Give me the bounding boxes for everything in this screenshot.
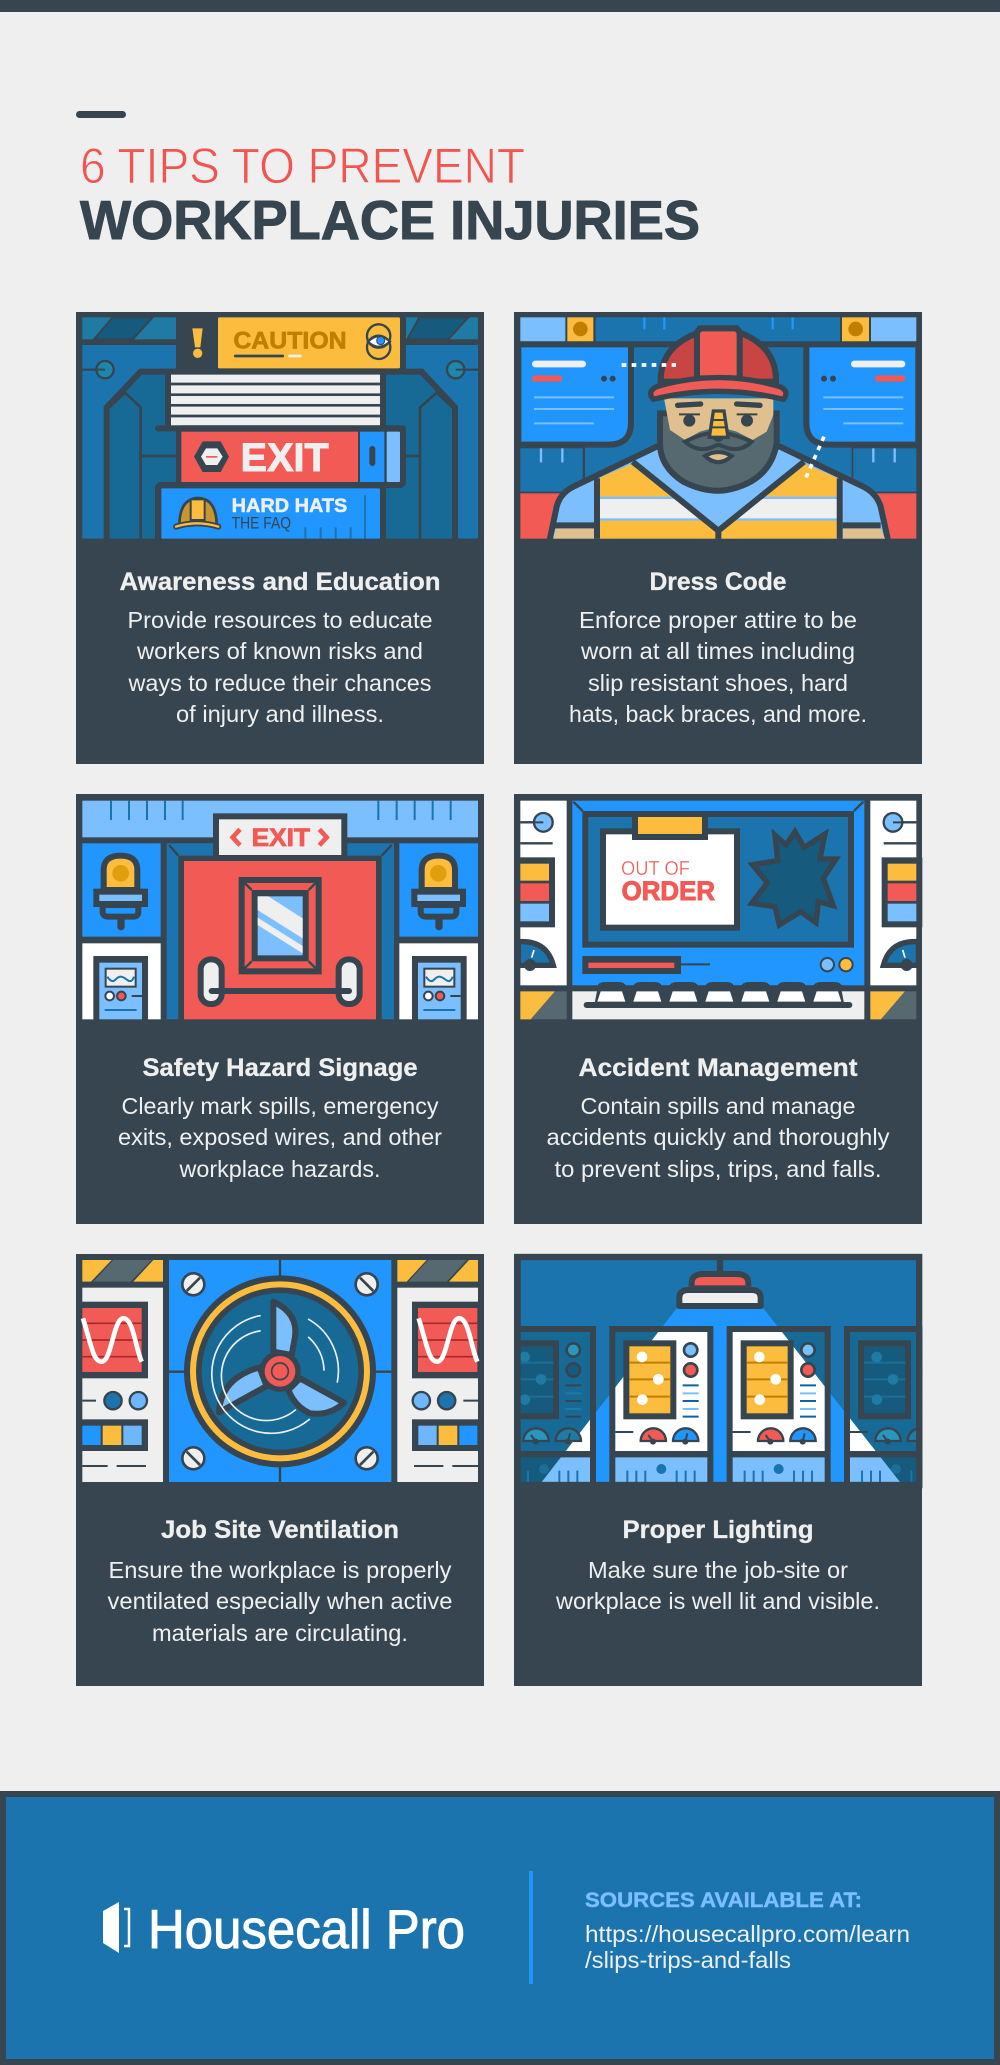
illustration: out of order machine (514, 801, 922, 1019)
illustration: ventilation fan (76, 1260, 484, 1482)
illustration: out of order machine: OUT OF (621, 858, 690, 880)
logo: Housecall Pro: Housecall Pro (148, 1898, 465, 1960)
illustration: caution, exit and hard hat signs: THE FAQ (232, 514, 291, 533)
card text: dress code: hats, back braces, and more. (569, 701, 867, 727)
card text: awareness and education (120, 568, 440, 727)
card text: dress code (569, 568, 867, 727)
title: WORKPLACE INJURIES (80, 189, 700, 251)
card text: job site ventilation: ventilated especially when active (108, 1588, 452, 1614)
sources text (585, 1889, 910, 1973)
illustration: out of order machine: ORDER (622, 876, 715, 906)
panel: job site ventilation (76, 1254, 484, 1686)
panel: accident management (514, 794, 922, 1224)
sources text: SOURCES AVAILABLE AT: (585, 1889, 862, 1912)
sources text: /slips-trips-and-falls (585, 1947, 791, 1973)
illustration: caution, exit and hard hat signs: EXIT (241, 436, 329, 480)
card text: dress code: Dress Code (650, 568, 787, 596)
card text: accident management: Contain spills and manage (580, 1093, 856, 1119)
title (80, 138, 700, 251)
top bar (0, 0, 1000, 12)
card text: safety hazard signage (118, 1054, 442, 1182)
panel: proper lighting (514, 1254, 922, 1686)
footer (0, 1791, 1000, 2065)
card text: accident management: accidents quickly and thoroughly (546, 1124, 890, 1150)
card text: dress code: Enforce proper attire to be (579, 607, 857, 633)
title: 6 TIPS TO PREVENT (80, 138, 525, 194)
card text: job site ventilation (108, 1516, 452, 1646)
card text: accident management: Accident Management (578, 1054, 858, 1082)
card text: proper lighting: Proper Lighting (622, 1516, 814, 1544)
card text: safety hazard signage: Safety Hazard Signage (142, 1054, 418, 1082)
card text: accident management: to prevent slips, trips, and falls. (554, 1156, 882, 1182)
illustration: exit door with alarms: EXIT (252, 824, 310, 852)
divider (529, 1871, 533, 1984)
card text: awareness and education: Provide resources to educate (128, 607, 432, 633)
card text: proper lighting: workplace is well lit and visible. (555, 1588, 880, 1614)
illustration: caution, exit and hard hat signs: CAUTION (233, 327, 347, 354)
card text: awareness and education: Awareness and Education (120, 568, 440, 596)
card text: dress code: worn at all times including (580, 638, 855, 664)
sources text: https://housecallpro.com/learn (585, 1921, 910, 1947)
header accent dash (76, 111, 126, 118)
panel: awareness and education (76, 312, 484, 764)
card text: safety hazard signage: exits, exposed wires, and other (118, 1124, 442, 1150)
card text: job site ventilation: Ensure the workplace is properly (108, 1557, 452, 1583)
card text: safety hazard signage: workplace hazards. (178, 1156, 380, 1182)
card text: accident management (546, 1054, 890, 1182)
card text: awareness and education: workers of known risks and (136, 638, 423, 664)
card text: proper lighting: Make sure the job-site or (588, 1557, 848, 1583)
illustration: caution, exit and hard hat signs: HARD HATS (232, 496, 347, 517)
card text: awareness and education: of injury and illness. (176, 701, 384, 727)
card text: safety hazard signage: Clearly mark spills, emergency (122, 1093, 439, 1119)
panel: safety hazard signage (76, 794, 484, 1224)
illustration: worker with hard hat and vest (518, 317, 918, 542)
card text: dress code: slip resistant shoes, hard (588, 670, 848, 696)
card text: proper lighting (555, 1516, 880, 1614)
card text: job site ventilation: materials are circulating. (152, 1620, 408, 1646)
card text: awareness and education: ways to reduce their chances (127, 670, 432, 696)
illustration: lamp lighting machine racks (492, 1257, 948, 1488)
illustration: exit door with alarms (82, 801, 478, 1023)
card text: job site ventilation: Job Site Ventilation (161, 1516, 399, 1544)
illustration: caution, exit and hard hat signs (76, 313, 484, 545)
panel: dress code (514, 312, 922, 764)
